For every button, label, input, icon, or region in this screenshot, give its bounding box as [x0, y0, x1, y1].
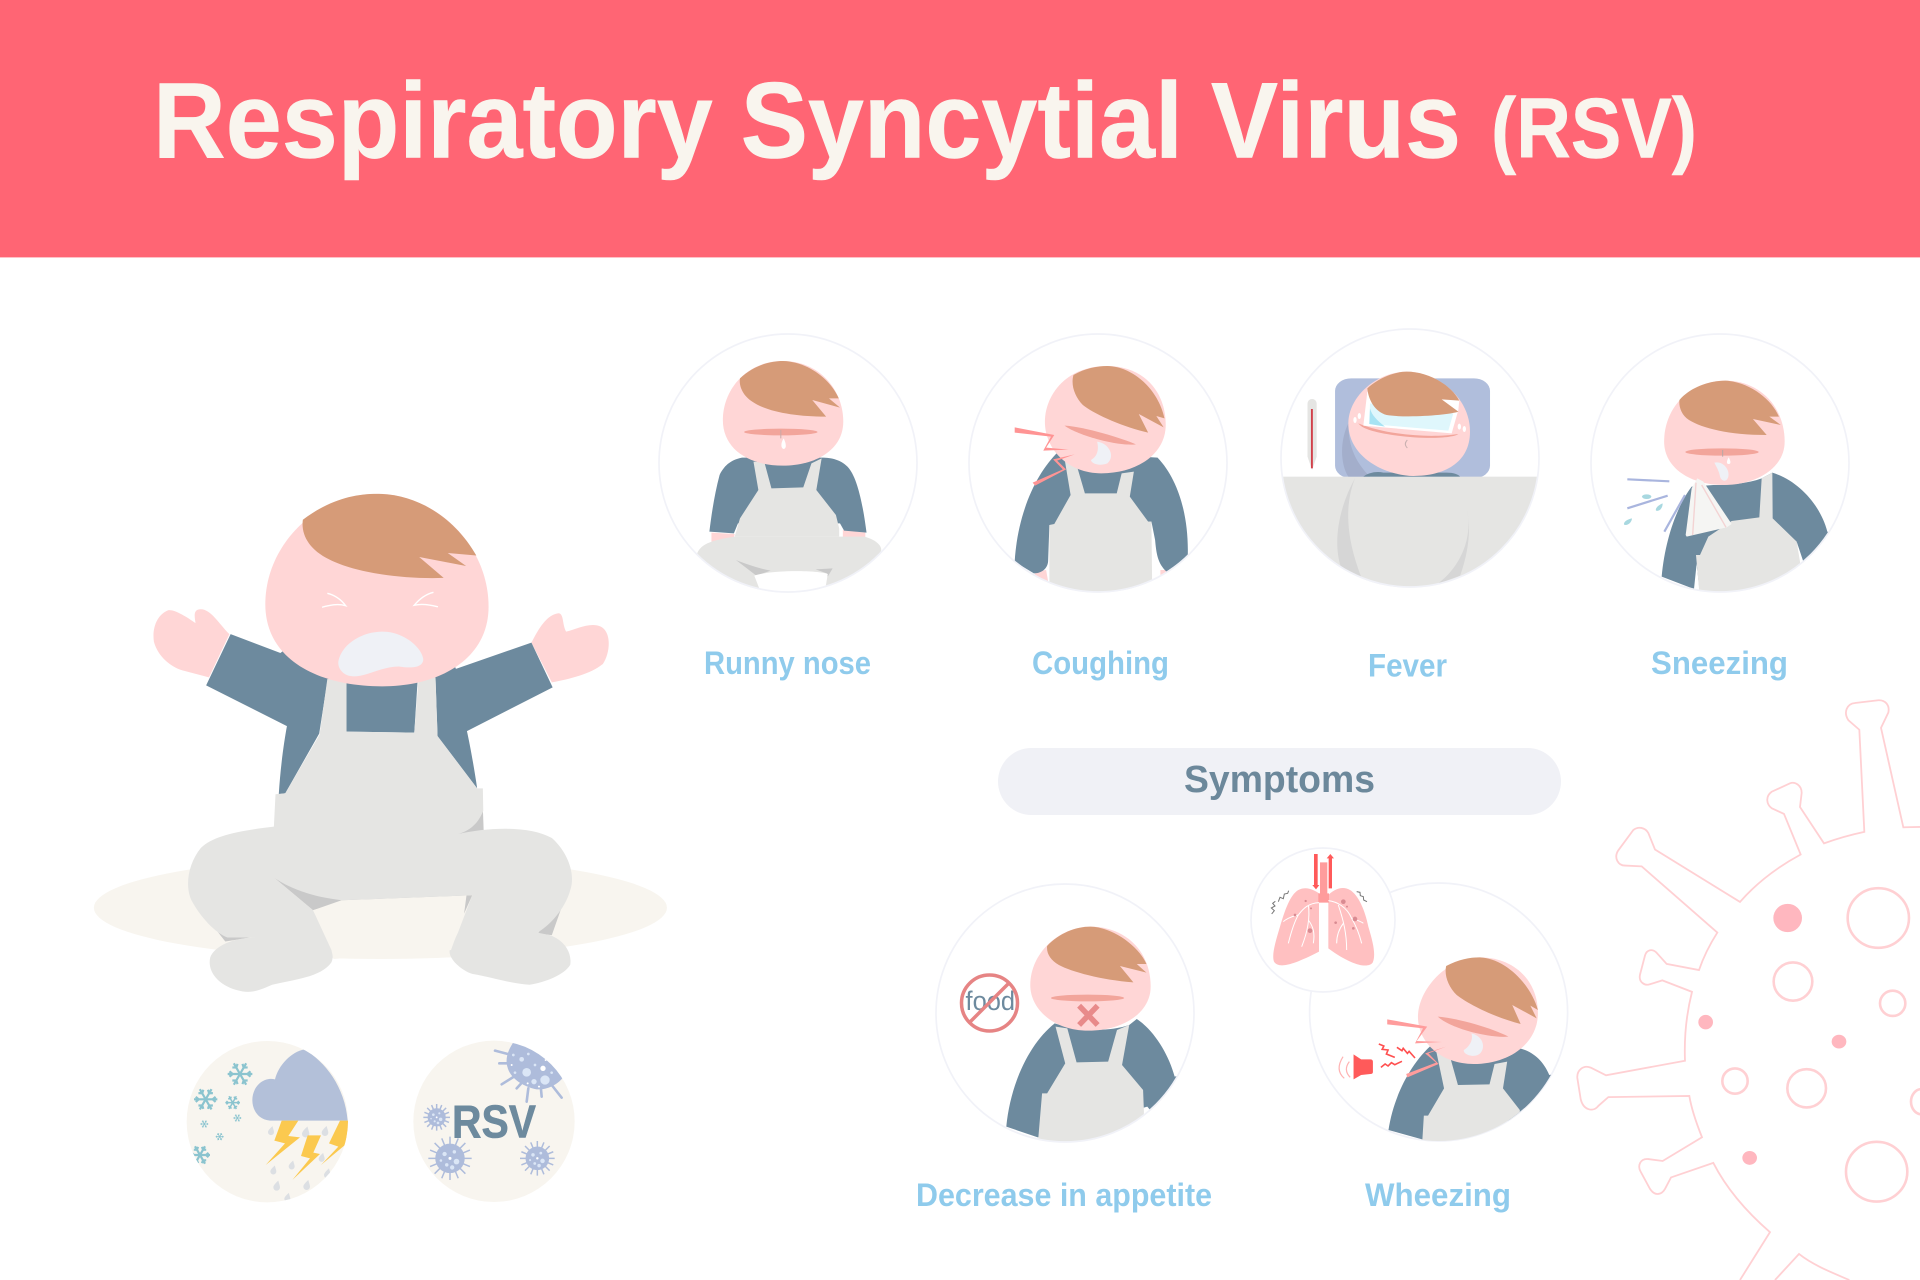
title: (RSV) [1491, 82, 1697, 176]
virus icon badge [413, 1041, 580, 1202]
wheezing circle [1310, 883, 1568, 1141]
lungs circle [1251, 848, 1395, 992]
icon: lungs inset [1251, 848, 1395, 992]
sick head on pillow [1342, 372, 1470, 477]
trachea [1318, 862, 1329, 903]
icon: speaker [1354, 1054, 1373, 1079]
virus body outline [1577, 700, 1920, 1280]
wheeze squiggles [1379, 1044, 1415, 1067]
sneeze droplets [1624, 494, 1663, 525]
sneezing circle [1591, 334, 1849, 592]
RSV badge text: RSV [452, 1096, 536, 1148]
panel: sneezing [1591, 334, 1849, 681]
panel: decrease in appetite [916, 884, 1215, 1213]
panel: wheezing [1251, 848, 1577, 1213]
coughing circle [969, 334, 1227, 592]
speaker sound arcs [1339, 1057, 1350, 1078]
label: runny nose: Runny nose [704, 645, 871, 681]
appetite circle [936, 884, 1194, 1142]
cushion [313, 900, 462, 959]
runny nose illustration [697, 361, 881, 597]
panel: coughing [969, 334, 1227, 681]
label: coughing: Coughing [1032, 645, 1169, 681]
lightning [266, 1121, 349, 1180]
icon: no food: food [966, 986, 1015, 1016]
weather badge [187, 1041, 348, 1202]
coughing illustration [1015, 366, 1188, 593]
leg shadows [199, 808, 564, 942]
sneezing head [1664, 381, 1785, 485]
inflamed spots [1294, 899, 1357, 933]
shirt [206, 634, 553, 794]
squeezed eyes [322, 592, 438, 607]
snowflakes [190, 1063, 252, 1164]
thermometer mercury [1311, 409, 1313, 468]
overalls [188, 677, 572, 992]
panel: runny nose [659, 334, 917, 681]
hair [303, 494, 476, 578]
main crying baby illustration [94, 494, 667, 992]
hands [153, 609, 609, 682]
wheezing illustration [1338, 957, 1551, 1141]
raindrops [268, 1126, 331, 1202]
crying mouth [338, 632, 423, 676]
virus rings and dots [1698, 888, 1920, 1202]
breath squiggles [1271, 891, 1367, 914]
thermometer [1307, 399, 1317, 470]
label: fever: Fever [1368, 648, 1447, 684]
appetite illustration [1006, 926, 1176, 1141]
floor shadow [94, 856, 667, 959]
cough lines [1387, 1019, 1446, 1077]
virus badge background [413, 1041, 575, 1202]
fever circle [1281, 329, 1539, 587]
sneeze lines [1627, 479, 1685, 532]
sneezing face details and tissue [1624, 448, 1759, 537]
header banner [0, 0, 1920, 257]
symptoms pill [998, 748, 1561, 815]
no-eating cross [1079, 1006, 1098, 1025]
background virus outline [1577, 700, 1920, 1280]
runny nose circle [659, 334, 917, 592]
large virus bug [494, 1043, 563, 1103]
cough lines [1015, 427, 1075, 486]
sneezing body [1662, 472, 1828, 591]
air arrows [1312, 854, 1334, 889]
lungs drawing [1271, 854, 1374, 966]
small viruses [423, 1104, 555, 1180]
cloud [252, 1049, 348, 1121]
head [265, 494, 489, 686]
label: decrease in appetite: Decrease in appetite [916, 1177, 1212, 1213]
label: wheezing: Wheezing [1365, 1177, 1511, 1213]
icon: no food [962, 975, 1018, 1031]
bronchi [1283, 901, 1363, 950]
panel: fever [1270, 329, 1546, 684]
lungs [1273, 888, 1374, 966]
tissue [1686, 478, 1732, 537]
fever bed illustration [1270, 378, 1546, 590]
label: sneezing: Sneezing [1651, 645, 1788, 681]
title: Respiratory Syncytial Virus [153, 60, 1461, 180]
heading: symptoms: Symptoms [1184, 759, 1375, 801]
weather contents [190, 1049, 349, 1202]
weather icon [187, 1041, 349, 1202]
